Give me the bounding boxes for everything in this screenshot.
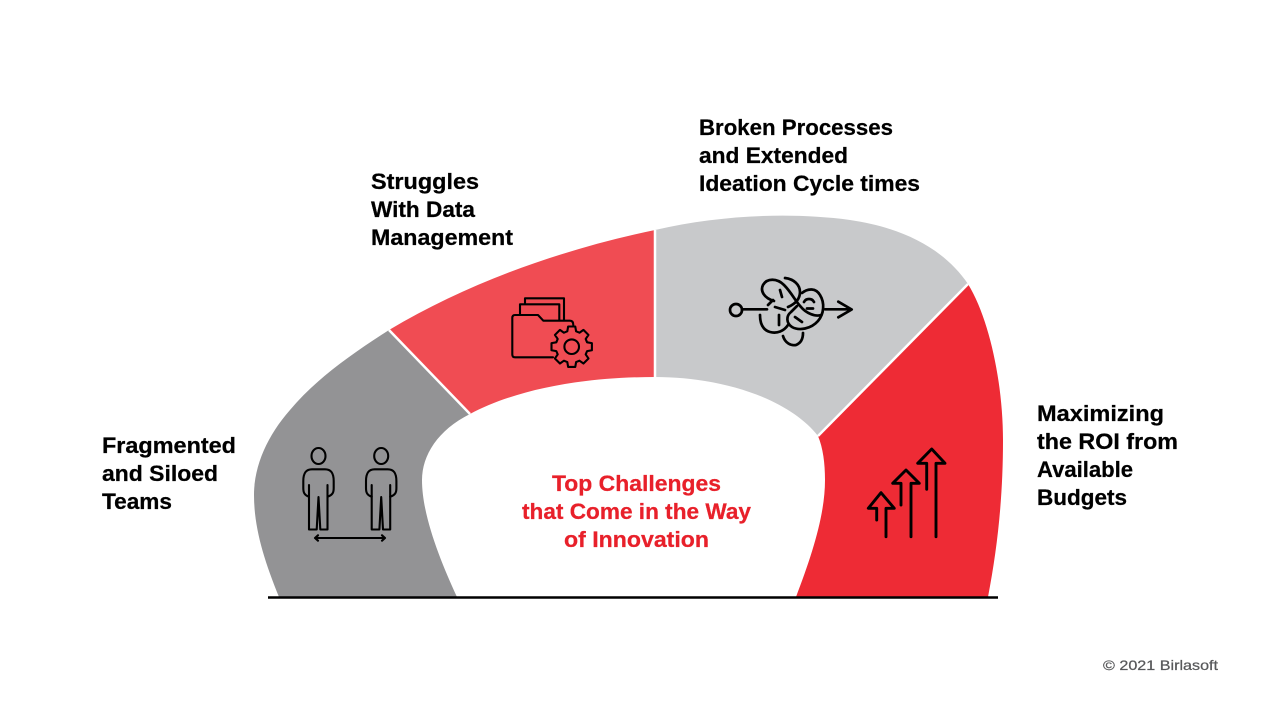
label: broken processes and extended ideation cycle times (699, 115, 920, 196)
icon: folder with gear (512, 298, 592, 367)
center heading: that Come in the Way (522, 499, 752, 524)
label: maximizing the ROI from available budgets: Budgets (1037, 485, 1127, 510)
label: broken processes and extended ideation cycle times: Ideation Cycle times (699, 171, 920, 196)
segment: fragmented teams (254, 330, 470, 597)
label: fragmented and siloed teams: and Siloed (102, 461, 218, 486)
label: fragmented and siloed teams (102, 433, 236, 514)
center heading: Top Challenges (552, 471, 721, 496)
icon: tangled process arrow (730, 278, 852, 345)
segment: maximizing ROI (796, 284, 1003, 597)
segment: broken processes (655, 216, 968, 436)
label: maximizing the ROI from available budgets: Available (1037, 457, 1133, 482)
segment: data management (389, 230, 655, 414)
segment dividers (389, 230, 968, 436)
baseline rule (268, 596, 998, 599)
label: broken processes and extended ideation cycle times: and Extended (699, 143, 848, 168)
label: fragmented and siloed teams: Fragmented (102, 433, 236, 458)
label: fragmented and siloed teams: Teams (102, 489, 172, 514)
icon: two separated people (303, 448, 396, 541)
center heading: of Innovation (564, 527, 709, 552)
panel: arch diagram (254, 216, 1003, 598)
label: maximizing the ROI from available budgets: Maximizing (1037, 401, 1164, 426)
label: broken processes and extended ideation cycle times: Broken Processes (699, 115, 893, 140)
label: struggles with data management: Management (371, 225, 514, 250)
label: struggles with data management: Struggles (371, 169, 479, 194)
label: struggles with data management (371, 169, 514, 250)
label: struggles with data management: With Data (371, 197, 476, 222)
label: maximizing the ROI from available budgets: the ROI from (1037, 429, 1178, 454)
icon: rising arrows (868, 449, 945, 537)
label: maximizing the ROI from available budgets (1037, 401, 1178, 510)
copyright: © 2021 Birlasoft (1103, 657, 1218, 673)
center heading (522, 471, 752, 552)
